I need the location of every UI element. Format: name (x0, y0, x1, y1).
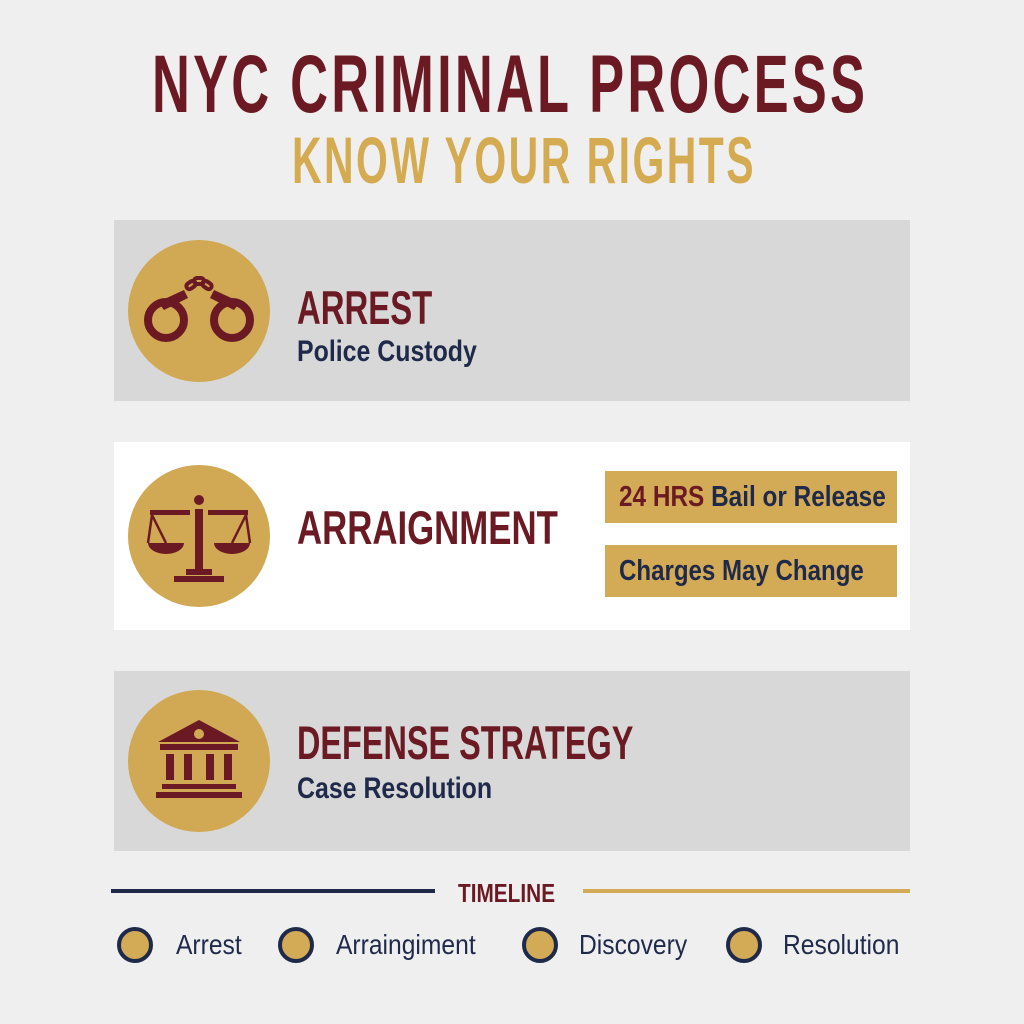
text: police custody: Police Custody (297, 335, 477, 368)
callout: 24 hrs: 24 HRS Bail or Release (619, 481, 886, 513)
timeline steps: Resolution (783, 929, 899, 960)
icon: scales (128, 465, 270, 607)
subtitle: KNOW YOUR RIGHTS (292, 123, 756, 197)
icon: handcuffs (128, 240, 270, 382)
panel: arraignment (114, 442, 910, 630)
callout: 24 hrs (605, 471, 897, 523)
panel: arrest (114, 220, 910, 401)
callout: charges: Charges May Change (619, 555, 864, 587)
callout: charges (605, 545, 897, 597)
icon: courthouse (128, 690, 270, 832)
title: NYC CRIMINAL PROCESS (152, 39, 868, 130)
timeline steps: Arrest (176, 929, 242, 960)
panel: defense (114, 671, 910, 851)
heading: arraignment: ARRAIGNMENT (297, 501, 558, 554)
timeline header (111, 878, 910, 908)
timeline header: TIMELINE (458, 878, 555, 908)
heading: arrest: ARREST (297, 281, 432, 334)
timeline steps (117, 927, 899, 963)
heading: defense strategy: DEFENSE STRATEGY (297, 716, 633, 769)
timeline steps: Arraingiment (336, 929, 476, 960)
timeline steps: Discovery (579, 929, 687, 960)
text: case resolution: Case Resolution (297, 772, 492, 805)
